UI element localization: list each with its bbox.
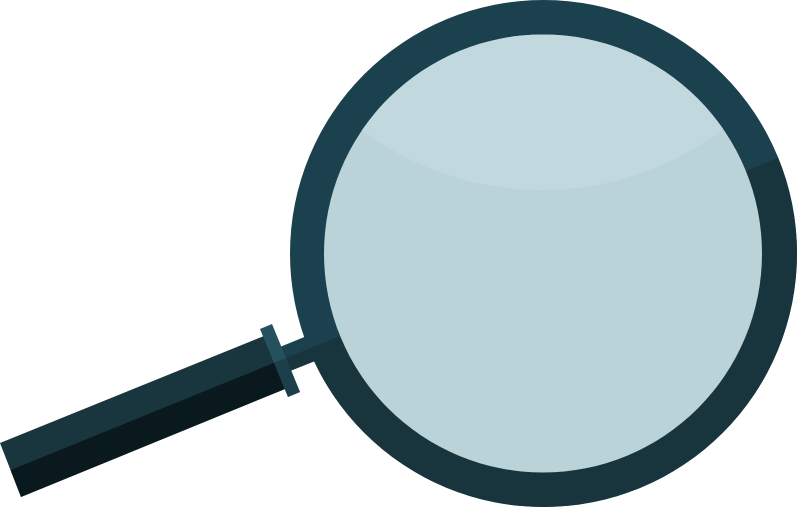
glass lens <box>324 34 762 472</box>
handle collar <box>260 324 300 397</box>
handle grip <box>0 336 285 497</box>
lens highlight <box>362 34 724 130</box>
handle connector <box>281 337 314 370</box>
magnifier ring <box>290 0 797 507</box>
